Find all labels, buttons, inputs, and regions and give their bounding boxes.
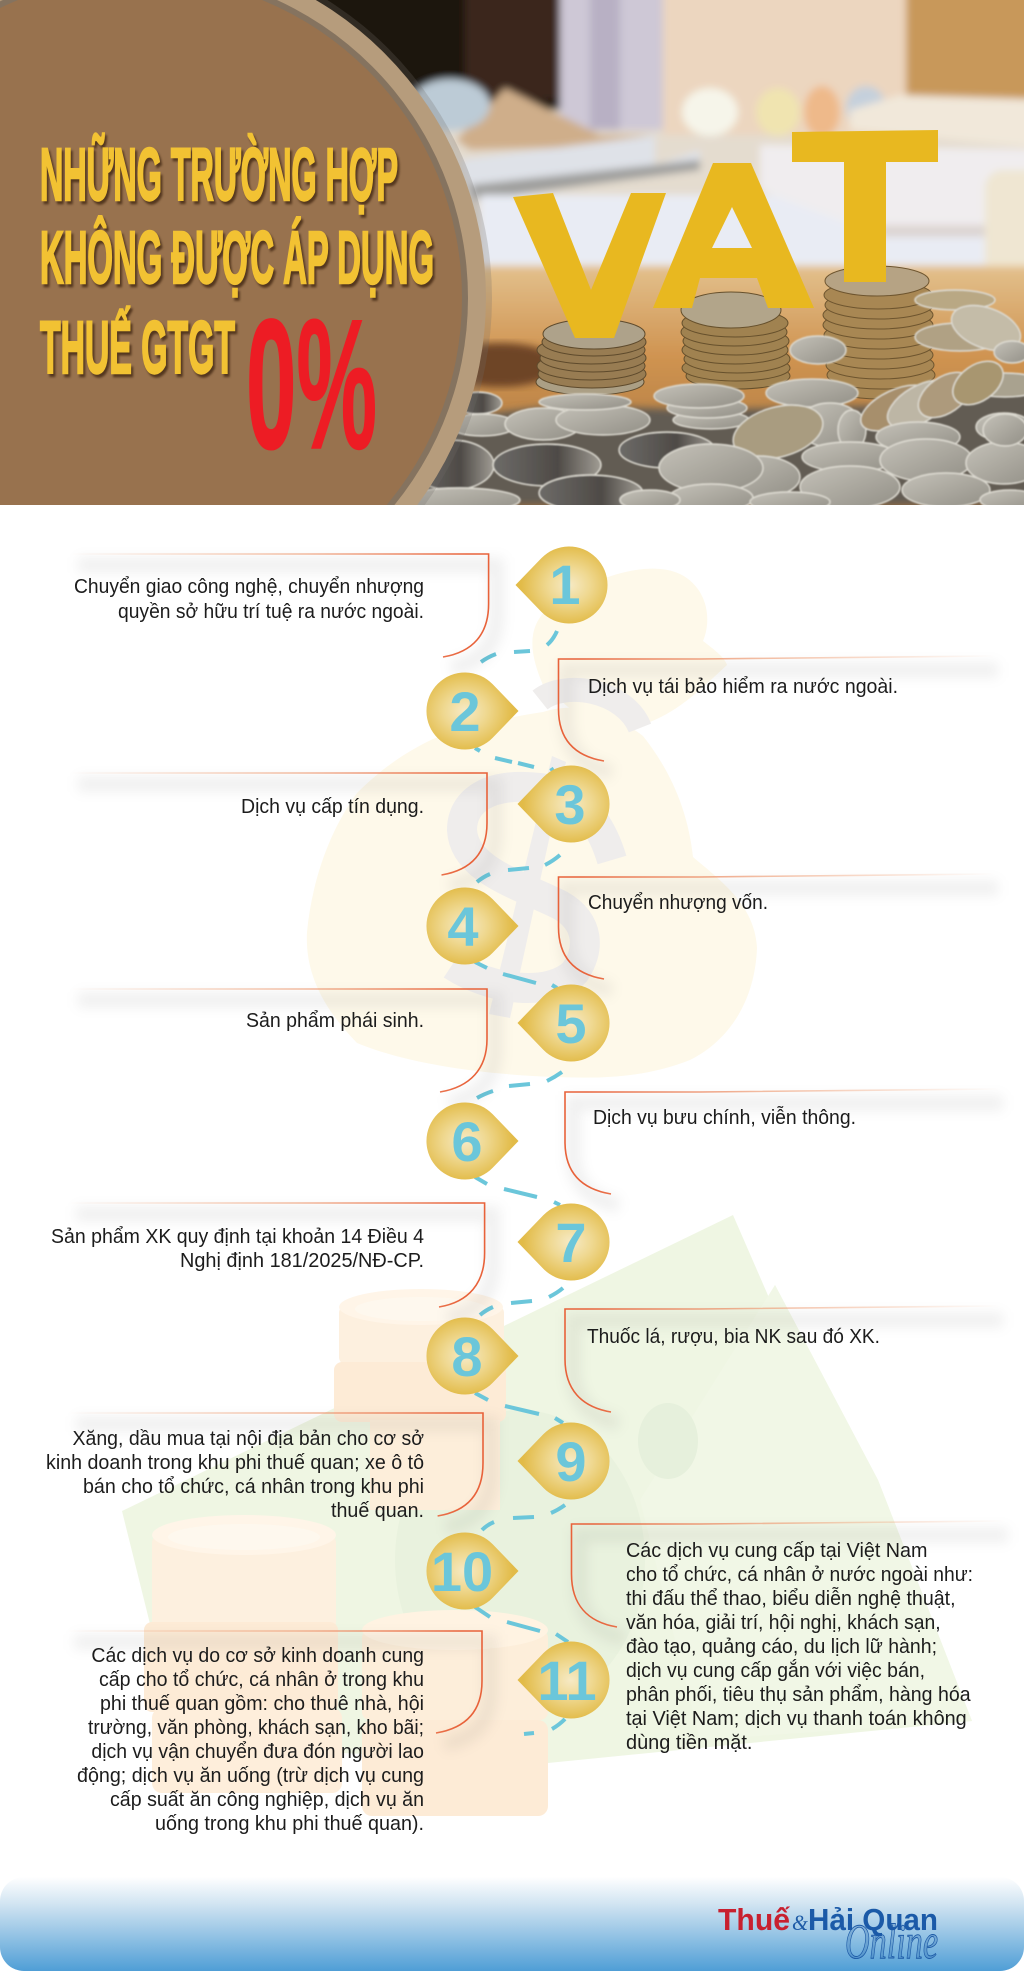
pin 9: 9 xyxy=(555,1430,587,1493)
text 10 xyxy=(626,1539,973,1754)
text 9: thuế quan. xyxy=(331,1499,424,1522)
pin 10: 10 xyxy=(431,1540,493,1603)
coin stack under V xyxy=(536,319,646,395)
text 9: kinh doanh trong khu phi thuế quan; xe ô tô xyxy=(46,1451,424,1474)
banknotes xyxy=(122,1215,972,1763)
letters VAT xyxy=(513,130,938,338)
text 10: dịch vụ cung cấp gắn với việc bán, xyxy=(626,1659,925,1682)
pin 1: 1 xyxy=(549,553,581,616)
text 1: Chuyển giao công nghệ, chuyển nhượng xyxy=(74,575,424,598)
pin 1 xyxy=(516,546,608,624)
pin 6: 6 xyxy=(451,1110,483,1173)
header: KHÔNG ĐƯỢC ÁP DỤNG xyxy=(40,216,434,299)
text 11: cấp cho tổ chức, cá nhân ở trong khu xyxy=(99,1668,424,1691)
pin 11 xyxy=(518,1642,610,1718)
item 3 xyxy=(70,766,610,886)
text 11: Các dịch vụ do cơ sở kinh doanh cung xyxy=(91,1644,424,1667)
pin 2: 2 xyxy=(449,680,481,743)
pin 2 xyxy=(426,672,518,750)
connector dashes xyxy=(475,631,568,1734)
text 11: uống trong khu phi thuế quan). xyxy=(155,1812,424,1835)
footer logo xyxy=(718,1902,938,1969)
pin 6 xyxy=(426,1102,518,1180)
pin 9 xyxy=(518,1422,610,1500)
pin 3: 3 xyxy=(554,773,586,836)
text 5: Sản phẩm phái sinh. xyxy=(246,1009,424,1032)
text 11: cấp suất ăn công nghiệp, dịch vụ ăn xyxy=(110,1788,424,1811)
pin 5: 5 xyxy=(555,992,587,1055)
pin 10 xyxy=(426,1532,518,1610)
text 10: cho tổ chức, cá nhân ở nước ngoài như: xyxy=(626,1563,973,1586)
pin 11: 11 xyxy=(537,1649,597,1712)
text 8: Thuốc lá, rượu, bia NK sau đó XK. xyxy=(587,1325,880,1348)
text 11: trường, văn phòng, khách sạn, kho bãi; xyxy=(88,1716,424,1739)
pin 3 xyxy=(518,766,610,842)
header: 0% xyxy=(246,282,377,488)
item 10 xyxy=(426,1521,1008,1754)
text 10: Các dịch vụ cung cấp tại Việt Nam xyxy=(626,1539,928,1562)
text 11: dịch vụ vận chuyển đưa đón người lao xyxy=(91,1740,424,1763)
dollar sign xyxy=(452,690,640,1018)
footer logo: Online xyxy=(845,1913,938,1969)
item 8 xyxy=(426,1306,1003,1423)
footer band xyxy=(0,1877,1024,1971)
text 11: động; dịch vụ ăn uống (trừ dịch vụ cung xyxy=(77,1764,424,1787)
footer logo: Thuế xyxy=(718,1902,791,1937)
pin 4: 4 xyxy=(447,895,479,958)
footer logo: Hải Quan xyxy=(808,1902,938,1937)
text 10: dùng tiền mặt. xyxy=(626,1731,752,1754)
text 2: Dịch vụ tái bảo hiểm ra nước ngoài. xyxy=(588,675,898,698)
header: NHỮNG TRƯỜNG HỢP xyxy=(40,133,398,216)
text 3: Dịch vụ cấp tín dụng. xyxy=(241,795,424,818)
text 1: quyền sở hữu trí tuệ ra nước ngoài. xyxy=(118,600,424,623)
table xyxy=(466,262,1024,505)
text 9: Xăng, dầu mua tại nội địa bản cho cơ sở xyxy=(72,1427,424,1450)
title xyxy=(40,133,434,389)
text 10: phân phối, tiêu thụ sản phẩm, hàng hóa xyxy=(626,1683,971,1706)
title: THUẾ GTGT xyxy=(40,306,235,389)
blurred office background xyxy=(280,0,1024,526)
item 7 xyxy=(51,1203,610,1318)
text 11: phi thuế quan gồm: cho thuê nhà, hội xyxy=(100,1692,424,1715)
coin stack under A xyxy=(681,292,790,389)
item 1 xyxy=(70,546,608,668)
text 11 xyxy=(77,1644,424,1835)
text 10: đào tạo, quảng cáo, du lịch lữ hành; xyxy=(626,1635,937,1658)
money bag xyxy=(307,569,757,1078)
item 2 xyxy=(426,656,998,772)
coin stack under T xyxy=(823,266,935,399)
text 1 xyxy=(74,575,424,623)
text 10: văn hóa, giải trí, hội nghị, khách sạn, xyxy=(626,1611,941,1634)
brown title circle xyxy=(0,0,492,505)
pin 8 xyxy=(426,1318,518,1394)
text 7 xyxy=(51,1225,424,1272)
header photo: VAT letters on coin stacks xyxy=(280,0,1024,526)
pin 8: 8 xyxy=(451,1325,483,1388)
item 5 xyxy=(70,984,610,1103)
header xyxy=(0,0,1024,505)
footer logo: & xyxy=(792,1910,809,1935)
text 4: Chuyển nhượng vốn. xyxy=(588,891,768,914)
dark base under the coin pile xyxy=(428,396,1024,505)
background illustration: money bag, banknotes and coins xyxy=(122,569,972,1816)
item 11 xyxy=(66,1631,610,1835)
text 9: bán cho tổ chức, cá nhân trong khu phi xyxy=(83,1475,424,1498)
item 9 xyxy=(46,1413,610,1527)
text 10: thi đấu thể thao, biểu diễn nghệ thuật, xyxy=(626,1587,956,1610)
text 7: Nghị định 181/2025/NĐ-CP. xyxy=(180,1249,424,1272)
text 10: tại Việt Nam; dịch vụ thanh toán không xyxy=(626,1707,967,1730)
pin 7 xyxy=(518,1204,610,1280)
coin stacks xyxy=(144,1289,548,1816)
text 6: Dịch vụ bưu chính, viễn thông. xyxy=(593,1106,856,1129)
text 7: Sản phẩm XK quy định tại khoản 14 Điều 4 xyxy=(51,1225,424,1248)
item 4 xyxy=(426,874,998,990)
text 9 xyxy=(46,1427,424,1522)
loose coins xyxy=(400,290,1024,512)
pin 5 xyxy=(518,984,610,1062)
pin 7: 7 xyxy=(555,1211,587,1274)
pin 4 xyxy=(426,888,518,964)
item 6 xyxy=(426,1089,1003,1205)
